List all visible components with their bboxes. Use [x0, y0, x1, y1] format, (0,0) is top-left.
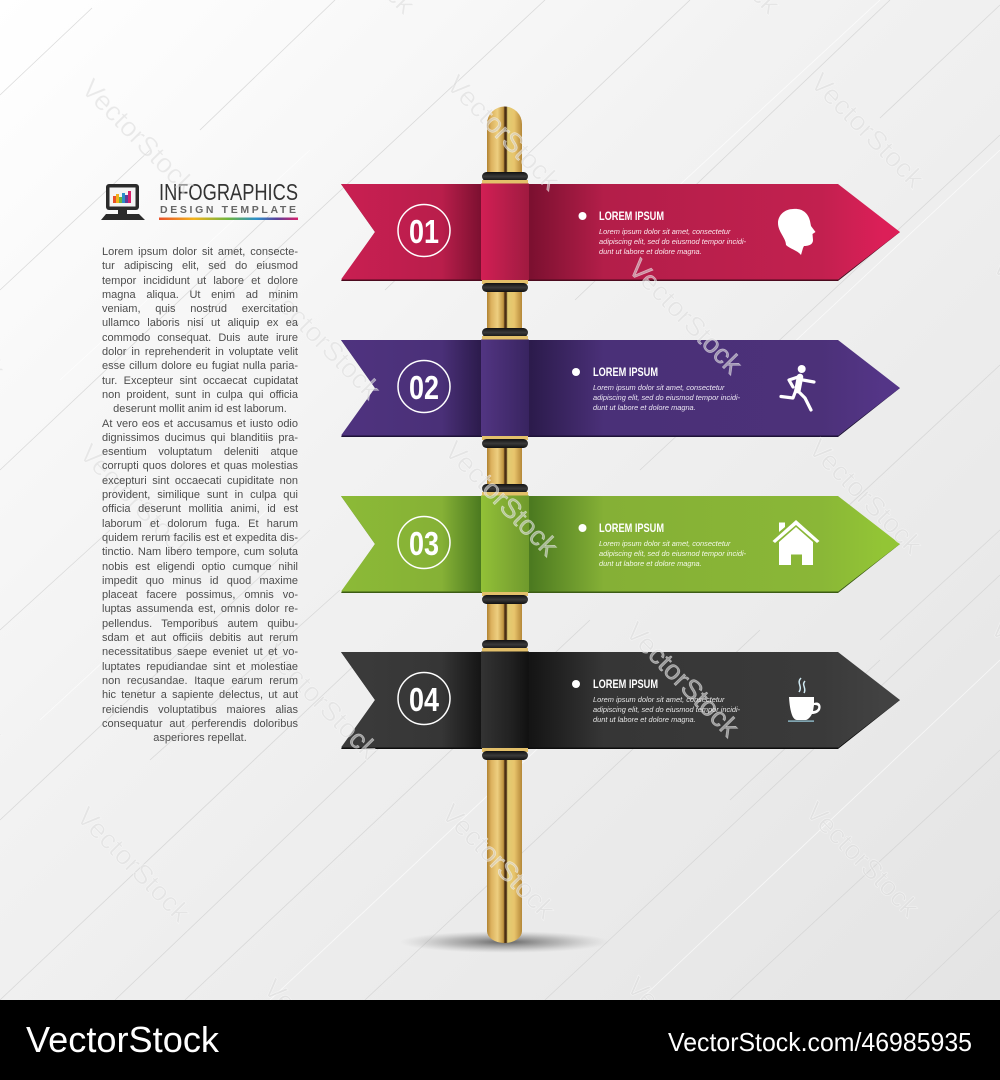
body text block: esse cillum dolore eu fugiat nulla paria- [102, 360, 298, 372]
panel: arrow 01 [341, 172, 900, 292]
watermarks: VectorStock [261, 278, 386, 405]
pole sleeve with rings [481, 640, 529, 760]
pole sleeve with rings [481, 484, 529, 604]
body text block: impedit quo minus id quod maxime [102, 575, 298, 587]
watermarks: VectorStock [439, 435, 564, 562]
body text block: non proident, sunt in culpa qui officia [102, 389, 298, 401]
footer url: VectorStock.com/46985935 [668, 1027, 972, 1057]
body text block: Lorem ipsum dolor sit amet, consecte- [102, 246, 298, 258]
body text block: provident, similique sunt in culpa qui [102, 489, 298, 501]
body text block: magna aliqua. Ut enim ad minim [102, 289, 298, 301]
signpost pole [400, 106, 610, 953]
bullet dot [578, 524, 586, 532]
body text block: esentium voluptatum deleniti atque [102, 446, 298, 458]
banner shape [341, 652, 900, 749]
description: adipiscing elit, sed do eiusmod tempor incidi- [599, 549, 747, 558]
footer bar [0, 1000, 1000, 1080]
banner shape [341, 496, 900, 593]
body text block: luptas assumenda est, omnis dolor re- [102, 603, 298, 615]
body text block: necessitatibus saepe eveniet ut et vo- [102, 646, 298, 658]
body text block: tur. Excepteur sint occaecat cupidatat [102, 375, 298, 387]
number badge: 02 [409, 369, 439, 406]
icon: head [778, 209, 816, 255]
logo title: INFOGRAPHICS [159, 179, 298, 205]
body text block: excepturi sint occaecati cupiditate non [102, 475, 298, 487]
number badge: 01 [409, 213, 439, 250]
body text block: corrupti quos dolores et quas molestias [102, 460, 298, 472]
watermarks: VectorStock [436, 798, 561, 925]
watermarks: VectorStock [441, 69, 566, 196]
body text block: dolor in reprehenderit in voluptate velit [102, 346, 298, 358]
number badge: 04 [409, 681, 440, 718]
banner shape [341, 184, 900, 281]
body text block: reiciendis voluptatibus maiores alias [102, 704, 298, 716]
body text block: pellendus. Temporibus autem quibu- [102, 618, 298, 630]
body text block: At vero eos et accusamus et iusto odio [102, 418, 298, 430]
watermarks: VectorStock [74, 438, 199, 565]
body text block: officia deserunt mollitia animi, id est [102, 503, 298, 515]
rainbow rule [159, 218, 298, 220]
pole sleeve with rings [481, 172, 529, 292]
description: dunt ut labore et dolore magna. [593, 403, 696, 412]
body text block: veniam, quis nostrud exercitation [102, 303, 298, 315]
icon: house [772, 520, 820, 565]
panel: arrow 04 [341, 640, 900, 760]
logo subtitle: DESIGN TEMPLATE [160, 204, 296, 216]
body text block: tinctio. Nam libero tempore, cum soluta [102, 546, 298, 558]
body text block: luptates repudiandae sint et molestiae [102, 661, 298, 673]
description: adipiscing elit, sed do eiusmod tempor incidi- [593, 393, 741, 402]
body text block: ullamco laboris nisi ut aliquip ex ea [102, 317, 298, 329]
body text block: nobis est eligendi optio cumque nihil [102, 561, 298, 573]
body text block: dignissimos ducimus qui blanditiis pra- [102, 432, 298, 444]
description: Lorem ipsum dolor sit amet, consectetur [599, 227, 731, 236]
number badge [398, 516, 450, 568]
watermarks: VectorStock [71, 801, 196, 928]
pole shadow [400, 931, 610, 953]
heading: LOREM IPSUM [593, 367, 658, 379]
watermarks: VectorStock [76, 73, 201, 200]
footer brand: VectorStock [26, 1019, 220, 1060]
body text block: tur adipiscing elit, sed do eiusmod [102, 260, 298, 272]
body text block: deserunt mollit anim id est laborum. [113, 403, 287, 415]
body text block: quidem rerum facilis est et expedita dis- [102, 532, 298, 544]
description: dunt ut labore et dolore magna. [599, 247, 702, 256]
watermarks: VectorStock [623, 253, 748, 380]
bullet dot [572, 680, 580, 688]
body text block: hic tenetur a sapiente delectus, ut aut [102, 689, 298, 701]
number badge [398, 204, 450, 256]
description: adipiscing elit, sed do eiusmod tempor incidi- [599, 237, 747, 246]
body text block: tempor incididunt ut labore et dolore [102, 275, 298, 287]
bullet dot [578, 212, 586, 220]
number badge [398, 360, 450, 412]
heading: LOREM IPSUM [599, 211, 664, 223]
description: Lorem ipsum dolor sit amet, consectetur [593, 695, 725, 704]
bullet dot [572, 368, 580, 376]
banner shape [341, 340, 900, 437]
number badge [398, 672, 450, 724]
heading: LOREM IPSUM [593, 679, 658, 691]
pole sleeve with rings [481, 328, 529, 448]
body text block: commodo consequat. Duis aute irure [102, 332, 298, 344]
description: adipiscing elit, sed do eiusmod tempor incidi- [593, 705, 741, 714]
icon: coffee cup [788, 678, 821, 722]
body text block: asperiores repellat. [153, 732, 247, 744]
body text block: sdam et aut officiis debitis aut rerum [102, 632, 298, 644]
body text block [102, 246, 298, 744]
body text block: consequatur aut perferendis doloribus [102, 718, 298, 730]
body text block: laborum et dolorum fuga. Et harum [102, 518, 298, 530]
watermarks: VectorStock [259, 638, 384, 765]
description: dunt ut labore et dolore magna. [599, 559, 702, 568]
watermarks: VectorStock [805, 67, 930, 194]
body text block: non recusandae. Itaque earum rerum [102, 675, 298, 687]
heading: LOREM IPSUM [599, 523, 664, 535]
icon: runner [781, 365, 814, 410]
watermarks: VectorStock [803, 433, 928, 560]
watermarks: VectorStock [800, 796, 925, 923]
pole shaft [487, 106, 522, 943]
description: Lorem ipsum dolor sit amet, consectetur [593, 383, 725, 392]
description: Lorem ipsum dolor sit amet, consectetur [599, 539, 731, 548]
panel: arrow 03 [341, 484, 900, 604]
body text block: placeat facere possimus, omnis vo- [102, 589, 298, 601]
icon: computer with chart [101, 184, 145, 220]
description: dunt ut labore et dolore magna. [593, 715, 696, 724]
header logo [101, 179, 298, 220]
number badge: 03 [409, 525, 439, 562]
panel: arrow 02 [341, 328, 900, 448]
watermarks: VectorStock [620, 616, 745, 743]
